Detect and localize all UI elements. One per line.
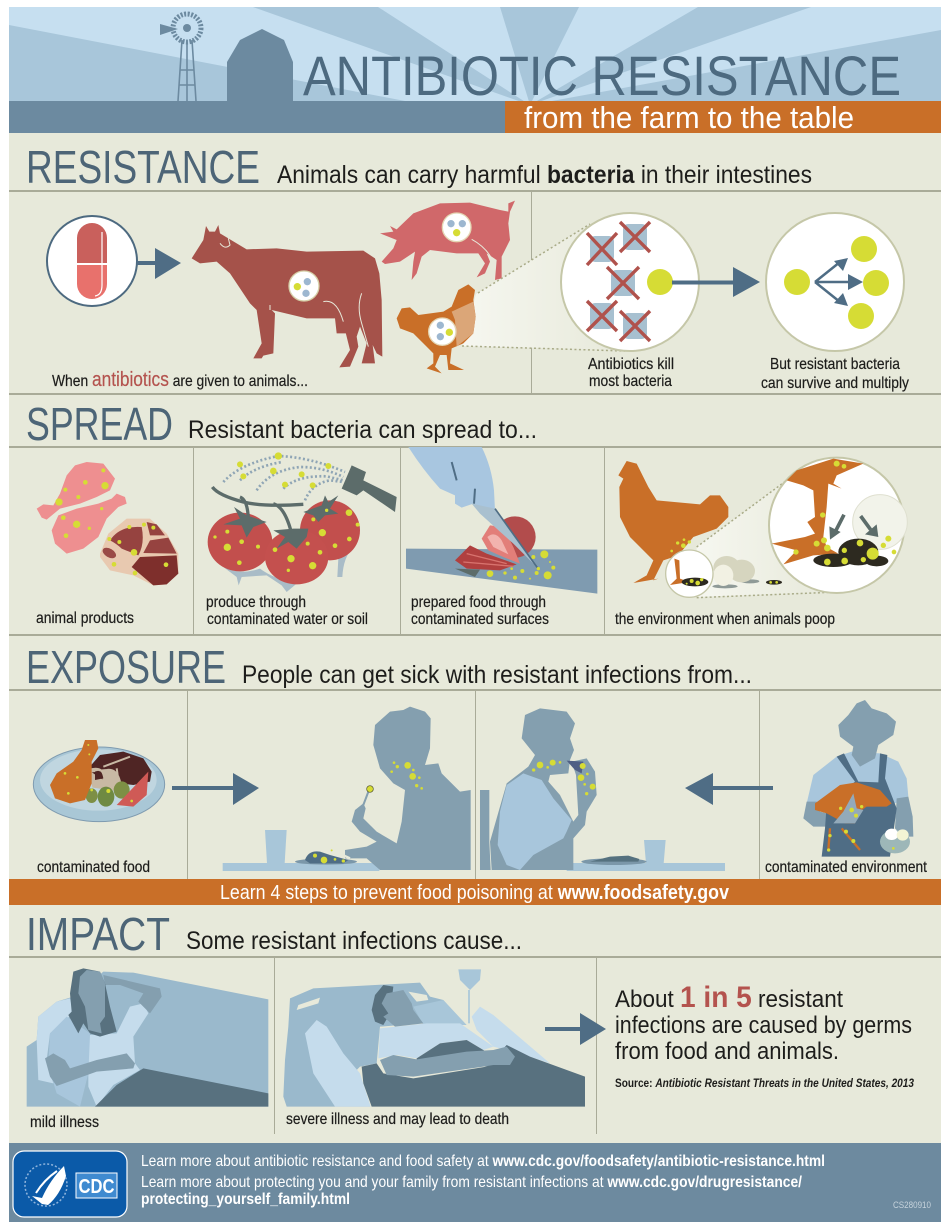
panel: bacteria killed and survive: [561, 213, 909, 392]
caption: produce: produce through: [206, 594, 306, 611]
footer: [9, 1143, 941, 1222]
callout: 1 in 5: About 1 in 5 resistant: [615, 981, 843, 1014]
small inset circle: [666, 550, 713, 597]
icon: eggs: [712, 556, 759, 588]
icon: chicken: [397, 284, 476, 373]
illustration: patient in hospital bed: [283, 969, 585, 1107]
caption: antibiotics kill: [588, 356, 674, 390]
caption: severe illness: severe illness and may lead to death: [286, 1111, 509, 1128]
panel: person eating: [223, 707, 471, 871]
subtitle: from the farm to the table: [524, 100, 854, 135]
footer links second: Learn more about protecting you and your family from resistant infections at www.cdc.gov/drugresistance/: [141, 1174, 802, 1191]
caption: animal products: animal products: [36, 610, 134, 627]
heading: resistance: RESISTANCE: [26, 141, 260, 193]
panel: contaminated environment: [765, 700, 927, 876]
icon: droppings: [766, 580, 782, 585]
illustration: woman on sofa: [27, 968, 268, 1107]
icon: gloved hand with knife: [408, 447, 537, 568]
icon: person: [345, 707, 471, 870]
caption: environment: the environment when animals poop: [615, 611, 835, 628]
CDC logo: [13, 1151, 127, 1217]
food safety banner: Learn 4 steps to prevent food poisoning at www.foodsafety.gov: [220, 882, 730, 904]
footer link continuation: protecting_yourself_family.html: [141, 1191, 350, 1208]
icon: drumsticks: [37, 462, 127, 554]
bacteria dots: [390, 761, 423, 790]
panel: environment: [618, 458, 907, 598]
arrow: [685, 773, 773, 805]
caption: prepared food: contaminated surfaces: [411, 611, 549, 628]
icon: cup: [265, 830, 287, 863]
icon: cow: [192, 225, 382, 367]
icon: windmill: [160, 14, 201, 101]
icon: egg basket: [880, 829, 910, 853]
caption: resistant bacteria survive: can survive and multiply: [761, 375, 909, 392]
icon: pig: [380, 201, 515, 280]
banner subtitle bar: [505, 101, 941, 133]
panel: animal products: [36, 462, 178, 627]
document code: CS280910: [893, 1200, 931, 1210]
zoom beam from chicken: [462, 224, 625, 350]
caption: antibiotics given: When antibiotics are given to animals...: [52, 369, 308, 391]
bacteria dots: [532, 760, 596, 795]
icon: cup: [644, 840, 666, 863]
caption: resistant bacteria survive: [761, 356, 909, 392]
caption: antibiotics kill: most bacteria: [589, 373, 672, 390]
header banner: [9, 7, 941, 133]
subheading: resistance: Animals can carry harmful bacteria in their intestines: [277, 161, 812, 189]
caption: produce: [206, 594, 368, 628]
icon: shirt: [498, 773, 572, 870]
callout: 1 in 5: infections are caused by germs: [615, 1012, 912, 1039]
arrow: [137, 248, 181, 279]
panel: prepared food: [406, 447, 597, 628]
subheading: spread: Resistant bacteria can spread to...: [188, 416, 537, 444]
callout: 1 in 5: [615, 981, 915, 1090]
CDC logo: CDC: [78, 1176, 114, 1198]
bacteria dots: [487, 550, 555, 580]
caption: prepared food: [411, 594, 549, 628]
caption: contaminated food: contaminated food: [37, 859, 150, 876]
zoom beam: [697, 480, 830, 597]
circle: antibiotics kill bacteria: [561, 213, 699, 351]
icon: water spray: [223, 452, 345, 500]
source: Source: Antibiotic Resistant Threats in the United States, 2013: [615, 1078, 915, 1090]
table: [223, 863, 379, 871]
icon: plate of food: [33, 740, 165, 822]
panel: severe illness: [283, 969, 606, 1128]
icon: farmer: [803, 700, 913, 857]
icon: cutting surface: [406, 549, 597, 594]
caption: mild illness: mild illness: [30, 1114, 99, 1131]
caption: produce: contaminated water or soil: [207, 611, 368, 628]
icon: tomatoes: [208, 487, 360, 592]
caption: prepared food: prepared food through: [411, 594, 546, 611]
callout: 1 in 5: from food and animals.: [615, 1038, 839, 1065]
caption: antibiotics kill: Antibiotics kill: [588, 356, 674, 373]
circle: resistant bacteria multiply: [766, 213, 904, 351]
subheading: exposure: People can get sick with resistant infections from...: [242, 661, 752, 689]
icon: hose nozzle: [342, 465, 397, 512]
panel: mild illness: [27, 968, 268, 1131]
caption: resistant bacteria survive: But resistant bacteria: [770, 356, 900, 373]
heading: impact: IMPACT: [26, 908, 170, 960]
icon: hen: [618, 461, 728, 583]
icon: capsule: [47, 216, 137, 306]
arrow: [672, 267, 760, 297]
arrow: [172, 773, 259, 805]
heading: exposure: EXPOSURE: [26, 641, 226, 693]
icon: fork: [363, 786, 373, 805]
icon: barn: [227, 29, 293, 101]
arrow: [545, 1013, 606, 1045]
panel: contaminated food: [33, 740, 165, 876]
icon: plate: [581, 856, 647, 865]
icon: chair and person: [480, 790, 491, 870]
caption: contaminated environment: contaminated environment: [765, 859, 927, 876]
subheading: impact: Some resistant infections cause...: [186, 927, 522, 955]
footer links: Learn more about antibiotic resistance and food safety at www.cdc.gov/foodsafety/antibiotic-resistance.html: [141, 1153, 825, 1170]
icon: plate: [295, 848, 357, 865]
panel: produce: [206, 452, 397, 628]
icon: steak: [100, 519, 178, 585]
panel: person touching mouth: [480, 708, 725, 871]
table: [567, 863, 725, 871]
icon: tomato being cut: [455, 516, 536, 577]
large inset circle: [769, 458, 907, 593]
panel: antibiotics given to animals: [47, 201, 625, 391]
heading: spread: SPREAD: [26, 398, 173, 450]
food safety banner: [9, 879, 941, 905]
